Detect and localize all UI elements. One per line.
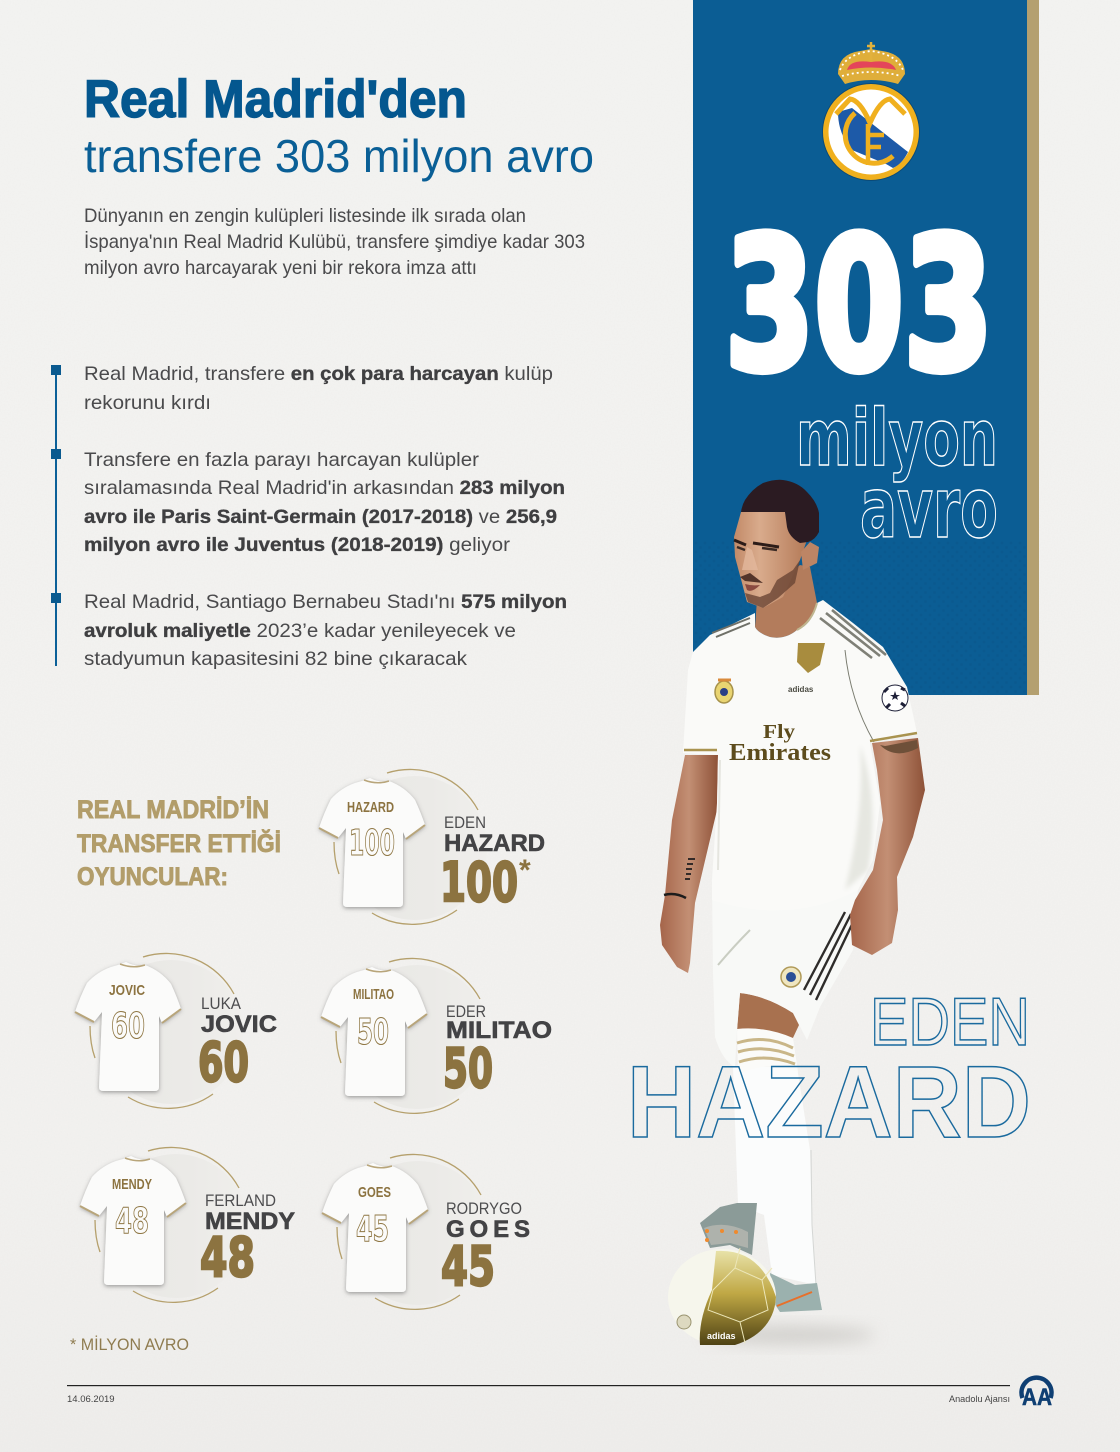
player card: Ferland Mendy: 48	[200, 1226, 255, 1289]
intro text	[84, 205, 585, 279]
player card: Eder Militao: 50	[357, 1012, 389, 1053]
intro text: milyon avro harcayarak yeni bir rekora imza attı	[84, 257, 477, 279]
gold badge	[797, 643, 825, 673]
player card: Luka Jovic: JOVIC	[201, 1011, 277, 1038]
bullet 2: sıralamasında Real Madrid'in arkasından 283 milyon	[84, 477, 565, 499]
icon: Real Madrid crest	[822, 42, 920, 180]
date: 14.06.2019	[67, 1394, 115, 1405]
bullet 1: Real Madrid, transfere en çok para harcayan kulüp	[84, 363, 553, 385]
player card: Eden Hazard: HAZARD	[347, 799, 394, 816]
player card: Rodrygo Goes: 45	[441, 1235, 495, 1298]
adidas mark: adidas	[788, 685, 814, 694]
player card: Luka Jovic	[75, 953, 277, 1108]
ear	[801, 542, 819, 570]
player card: Eder Militao	[321, 958, 552, 1113]
knee sock with bands	[737, 1028, 798, 1075]
player card: Rodrygo Goes: GOES	[358, 1184, 391, 1201]
outlined name: HAZARD: HAZARD	[627, 1045, 1031, 1159]
section heading: transferred players: TRANSFER ETTİĞİ	[77, 829, 281, 858]
player card: Rodrygo Goes: RODRYGO	[446, 1199, 522, 1218]
player card: Ferland Mendy: MENDY	[112, 1176, 152, 1193]
bullet 3	[84, 591, 567, 670]
jersey crest	[715, 680, 733, 703]
player card: Ferland Mendy: MENDY	[205, 1208, 295, 1235]
player card: Eder Militao: MILITAO	[353, 986, 394, 1003]
player card: Eder Militao: MILITAO	[446, 1017, 552, 1044]
timeline markers	[51, 365, 61, 666]
badge disc	[822, 84, 920, 180]
beard	[745, 560, 800, 608]
sponsor text: Fly Emirates: Emirates	[729, 740, 831, 766]
sleeve trims	[684, 733, 917, 750]
collar	[797, 603, 817, 630]
player card: Eden Hazard: HAZARD	[444, 830, 545, 857]
source: Anadolu Ajansı	[949, 1394, 1010, 1405]
big number 303: 303	[725, 199, 993, 411]
nose shadow	[742, 547, 758, 570]
player card: Eden Hazard	[319, 769, 545, 924]
bullet 1: rekorunu kırdı	[84, 392, 211, 414]
shorts crest	[781, 967, 801, 987]
player card: Eden Hazard: EDEN	[444, 813, 486, 832]
footnote: * MİLYON AVRO	[70, 1335, 189, 1354]
moustache and mouth	[740, 573, 763, 583]
right leg sock	[733, 1067, 816, 1285]
arm tattoo	[880, 740, 918, 753]
player card: Rodrygo Goes	[322, 1154, 530, 1309]
M letter	[836, 99, 905, 123]
outlined word: avro: avro	[860, 459, 998, 557]
section heading: transferred players: REAL MADRİD’İN	[77, 796, 269, 824]
sponsor text: Fly Emirates	[729, 721, 831, 766]
player card: Ferland Mendy: 48	[115, 1201, 149, 1242]
ball: adidas	[707, 1331, 736, 1341]
F letter	[868, 124, 884, 165]
subtitle: transfere 303 milyon avro	[84, 130, 594, 182]
player photo illustration: Eden Hazard	[660, 480, 925, 1345]
section heading: transferred players	[77, 796, 281, 891]
player card: Eden Hazard: *	[519, 854, 531, 887]
standing boot	[770, 1273, 822, 1312]
neck	[755, 565, 817, 638]
bullet 2: avro ile Paris Saint-Germain (2017-2018) ve 256,9	[84, 506, 557, 528]
intro text: Dünyanın en zengin kulüpleri listesinde ilk sırada olan	[84, 205, 526, 227]
right arm	[850, 738, 925, 955]
footer rule	[67, 1385, 1010, 1386]
player card: Ferland Mendy	[80, 1147, 295, 1302]
icon: Anadolu Agency logo: AA	[1022, 1384, 1052, 1411]
face	[734, 512, 807, 608]
jersey	[683, 600, 917, 910]
shorts stripes	[804, 912, 857, 1000]
sponsor text: Fly Emirates: Fly	[763, 721, 795, 743]
section heading: transferred players: OYUNCULAR:	[77, 863, 228, 891]
crown	[838, 42, 905, 84]
player card: Luka Jovic: 60	[198, 1031, 249, 1094]
player card: Ferland Mendy: FERLAND	[205, 1191, 276, 1210]
bullet 2	[84, 449, 565, 556]
shorts	[712, 880, 858, 1067]
player card: Eden Hazard: 100	[440, 851, 518, 914]
bullet 3: Real Madrid, Santiago Bernabeu Stadı'nı 575 milyon	[84, 591, 567, 613]
bullet 2: milyon avro ile Juventus (2018-2019) geliyor	[84, 534, 511, 556]
hair	[741, 480, 819, 543]
panel: blue hero column	[693, 0, 1039, 695]
wrist tattoo	[685, 859, 695, 879]
ball	[668, 1248, 776, 1345]
left arm	[660, 755, 718, 973]
player card: Luka Jovic: 60	[111, 1006, 145, 1047]
champions league patch	[882, 685, 908, 711]
player card: Rodrygo Goes: GOES	[446, 1216, 530, 1243]
wristband	[664, 894, 686, 898]
player card: Eder Militao: 50	[443, 1037, 493, 1100]
shoulder stripes	[820, 610, 886, 658]
thigh	[737, 993, 799, 1040]
player card: Eden Hazard: 100	[349, 823, 395, 864]
outlined word: milyon: milyon	[796, 394, 998, 484]
player card: Luka Jovic: JOVIC	[109, 982, 145, 999]
bullet 3: avroluk maliyetle 2023’e kadar yenileyecek ve	[84, 620, 516, 642]
player card: Eder Militao: EDER	[446, 1002, 486, 1021]
raised boot	[700, 1203, 757, 1255]
intro text: İspanya'nın Real Madrid Kulübü, transfere şimdiye kadar 303	[84, 230, 585, 253]
eyes and brows	[734, 540, 779, 547]
bullet 1	[84, 363, 553, 414]
bullet 3: stadyumun kapasitesini 82 bine çıkaracak	[84, 648, 467, 670]
gold edge stripe	[1027, 0, 1039, 695]
player card: Luka Jovic: LUKA	[201, 994, 242, 1013]
outlined name: EDEN: EDEN	[870, 984, 1030, 1060]
bullet 2: Transfere en fazla parayı harcayan kulüpler	[84, 449, 480, 471]
C letter	[845, 113, 893, 163]
player card: Rodrygo Goes: 45	[356, 1209, 389, 1250]
ground shadow	[705, 1326, 875, 1344]
title: Real Madrid'den	[84, 70, 467, 129]
title	[84, 70, 594, 182]
